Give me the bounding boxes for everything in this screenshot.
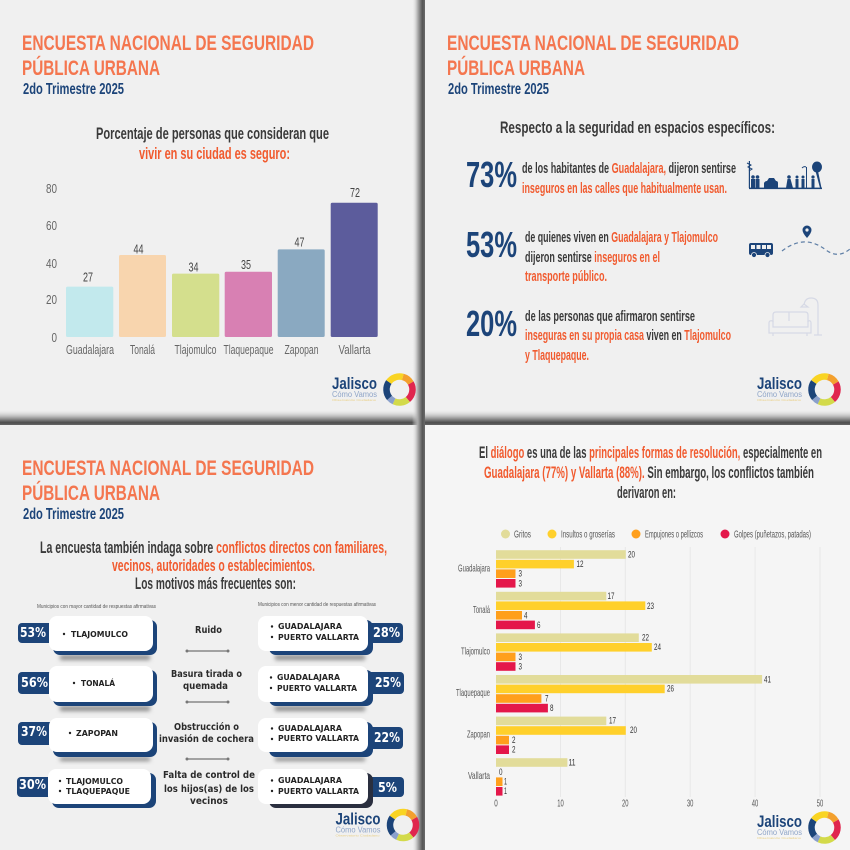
heading: Porcentaje de personas que consideran que: [96, 125, 329, 143]
subtitle: 2do Trimestre 2025: [23, 506, 124, 523]
title: ENCUESTA NACIONAL DE SEGURIDAD: [22, 457, 314, 480]
logo: Cómo Vamos: [336, 826, 380, 834]
category labels: Vallarta: [338, 342, 371, 357]
motive: Falta de control de: [163, 770, 255, 781]
logo: Observatorio Ciudadano: [336, 834, 380, 838]
left card: TLAJOMULCO: [66, 776, 123, 786]
right card: 22%: [374, 731, 400, 746]
bars: Zapopan: 17: [609, 716, 616, 726]
bars: Tlajomulco: 22: [642, 632, 649, 642]
motive: Ruido: [195, 625, 222, 636]
right card: PUERTO VALLARTA: [278, 786, 360, 796]
right card: GUADALAJARA: [277, 672, 341, 682]
logo: Observatorio Ciudadano: [757, 398, 801, 402]
row: hijos de los vecinos: [17, 769, 404, 808]
column caption: menor: Municipios con menor cantidad de respuestas afirmativas: [258, 602, 376, 608]
right card: [258, 718, 403, 761]
panel: seguridad en espacios específicos: [425, 0, 850, 425]
bars: Tonalá: 23: [647, 601, 654, 611]
heading: [96, 125, 329, 163]
subtitle: 2do Trimestre 2025: [448, 81, 549, 98]
x axis labels: 10: [557, 798, 564, 810]
bars: Guadalajara: [496, 550, 635, 588]
right card: PUERTO VALLARTA: [278, 733, 360, 743]
row: cochera: [18, 718, 403, 761]
title: PÚBLICA URBANA: [22, 56, 160, 80]
bars: Tlaquepaque: 41: [764, 674, 771, 684]
category labels: Guadalajara: [66, 342, 115, 357]
value labels: 44: [134, 242, 144, 256]
icon: sofa and lamp: [769, 298, 822, 336]
category labels: Tlaquepaque: [456, 687, 490, 699]
right card: PUERTO VALLARTA: [278, 632, 360, 642]
category labels: Tonalá: [130, 342, 155, 357]
logo: Observatorio Ciudadano: [757, 836, 801, 840]
y axis labels: 60: [46, 218, 57, 233]
title: [22, 32, 314, 80]
legend: Empujones o pellizcos: [645, 530, 703, 540]
category labels: [66, 342, 371, 357]
value labels: 27: [83, 270, 93, 284]
left card: [17, 769, 156, 808]
title: [22, 457, 314, 505]
logo: [757, 812, 838, 840]
statistic: 20%: inseguras en su propia casa viven en Tlajomulco: [525, 328, 731, 344]
bars: Zapopan: 2: [512, 744, 516, 754]
column caption: mayor: Municipios con mayor cantidad de respuestas afirmativas: [37, 604, 156, 610]
x axis labels: 0: [494, 798, 498, 810]
bars: Tlaquepaque: 7: [545, 694, 548, 704]
value labels: 34: [188, 260, 198, 274]
bars: Tlajomulco: 3: [518, 652, 522, 662]
category labels: Vallarta: [468, 770, 490, 782]
bars: Guadalajara: 3: [518, 568, 522, 578]
left card: TLAQUEPAQUE: [66, 786, 130, 796]
logo: Jalisco: [332, 374, 377, 393]
right card: [258, 769, 404, 808]
heading: [479, 444, 822, 502]
row: ruido: [18, 616, 403, 660]
bars: Vallarta: 1: [504, 786, 507, 796]
bars: [66, 203, 378, 337]
subtitle: 2do Trimestre 2025: [23, 81, 124, 98]
logo: Jalisco: [757, 812, 802, 831]
logo: Jalisco: [336, 810, 380, 828]
value labels: 47: [294, 234, 304, 250]
title: ENCUESTA NACIONAL DE SEGURIDAD: [447, 32, 739, 55]
statistic: 53%: [466, 224, 718, 285]
bars: Vallarta: 0: [499, 767, 502, 777]
right card: 25%: [375, 676, 401, 691]
category labels: Tlajomulco: [461, 646, 490, 658]
right card: 5%: [378, 781, 397, 796]
y axis labels: 0: [52, 330, 57, 345]
statistic: 73%: inseguros en las calles que habitualmente usan.: [522, 181, 727, 197]
heading: derivaron en:: [617, 484, 676, 502]
category labels: Tlajomulco: [174, 342, 216, 357]
bars: Vallarta: 1: [504, 776, 507, 786]
left card: [18, 616, 157, 660]
bars: Zapopan: 20: [630, 725, 637, 735]
right card: GUADALAJARA: [278, 775, 343, 785]
horizontal bar chart: [456, 547, 823, 810]
motive: [186, 625, 230, 652]
logo: Observatorio Ciudadano: [332, 398, 376, 402]
icon: street scene: [747, 161, 822, 189]
right card: [258, 616, 403, 660]
x axis labels: 40: [752, 798, 758, 810]
statistic: 53%: dijeron sentirse inseguros en el: [525, 250, 660, 266]
heading: La encuesta también indaga sobre conflictos directos con familiares,: [40, 539, 387, 557]
right card: 28%: [373, 626, 400, 641]
right card: PUERTO VALLARTA: [277, 683, 358, 693]
value labels: 72: [350, 185, 360, 200]
left card: ZAPOPAN: [76, 728, 118, 738]
motive: invasión de cochera: [159, 733, 254, 745]
motive: Basura tirada o: [171, 669, 242, 680]
motive: vecinos: [190, 796, 228, 807]
legend: [501, 530, 811, 540]
bar chart: [46, 181, 378, 357]
statistic: 20%: 20%: [466, 303, 517, 344]
bars: Tonalá: [496, 591, 654, 630]
bars: Tlaquepaque: 26: [667, 684, 674, 694]
statistic: 73%: 73%: [466, 154, 517, 195]
x axis labels: 20: [622, 798, 629, 810]
bars: Tonalá: 4: [524, 610, 528, 620]
right card: [258, 666, 404, 711]
category labels: Zapopan: [467, 728, 490, 740]
left card: 30%: [19, 778, 46, 793]
left card: [18, 718, 157, 761]
motive: [171, 669, 242, 704]
statistic: 20%: de las personas que afirmaron sentirse: [525, 309, 695, 325]
y axis labels: 40: [46, 256, 57, 271]
heading: Los motivos más frecuentes son:: [135, 575, 296, 593]
x axis labels: [494, 798, 823, 810]
statistic: 53%: transporte público.: [525, 269, 607, 285]
heading: vivir en su ciudad es seguro:: [139, 145, 290, 163]
panel: porcentaje de personas que consideran seguro vivir en su ciudad: [0, 0, 425, 425]
title: [447, 32, 739, 80]
right card: GUADALAJARA: [278, 723, 343, 733]
bars: Guadalajara: 12: [576, 559, 584, 569]
y axis labels: 80: [46, 181, 57, 196]
bars: Guadalajara: 3: [518, 578, 522, 588]
bars: Guadalajara: 20: [628, 550, 635, 560]
y axis labels: [46, 181, 57, 345]
category labels: [456, 562, 490, 782]
motive: los hijos(as) de los: [164, 784, 254, 795]
bars: Zapopan: 2: [512, 735, 516, 745]
statistic: 73%: de los habitantes de Guadalajara, dijeron sentirse: [522, 161, 736, 177]
category labels: Guadalajara: [458, 562, 490, 574]
logo: Cómo Vamos: [757, 390, 802, 399]
bars: Zapopan: [496, 716, 637, 754]
left card: TONALÁ: [81, 677, 116, 688]
statistic: 53%: de quienes viven en Guadalajara y Tlajomulco: [525, 230, 718, 246]
bars: Tlajomulco: [496, 632, 661, 672]
logo: [757, 374, 838, 402]
x axis labels: 50: [817, 798, 823, 810]
title: ENCUESTA NACIONAL DE SEGURIDAD: [22, 32, 314, 55]
bars: Tonalá: 6: [537, 620, 540, 630]
bars: Tlajomulco: 24: [654, 642, 661, 652]
bars: Tlajomulco: 3: [518, 662, 522, 672]
title: PÚBLICA URBANA: [447, 56, 585, 80]
left card: [18, 666, 157, 711]
panel: conflictos directos: [0, 425, 425, 850]
motive: [159, 721, 254, 760]
heading: vecinos, autoridades o establecimientos.: [112, 557, 315, 575]
statistic: 20%: [466, 303, 731, 364]
bars: Tlaquepaque: 8: [550, 703, 554, 713]
heading: [40, 539, 387, 593]
logo: Jalisco: [757, 374, 802, 393]
category labels: Tlaquepaque: [224, 342, 274, 357]
left card: 37%: [21, 725, 47, 740]
right card: GUADALAJARA: [278, 621, 343, 631]
value labels: [83, 185, 360, 284]
statistic: 73%: [466, 154, 736, 197]
category labels: Zapopan: [284, 342, 318, 357]
logo: Cómo Vamos: [332, 390, 377, 399]
y axis labels: 20: [46, 292, 57, 307]
motive: quemada: [183, 681, 228, 692]
legend: Gritos: [514, 530, 531, 540]
bars: Vallarta: [496, 758, 576, 796]
motive: [163, 770, 255, 807]
logo: [332, 374, 413, 402]
logo: [336, 810, 416, 838]
icon: bus and route: [749, 226, 850, 258]
row: basura: [18, 666, 404, 711]
bars: Tonalá: 17: [608, 591, 614, 601]
bars: Tlaquepaque: [496, 674, 771, 713]
value labels: 35: [241, 257, 251, 272]
logo: Cómo Vamos: [757, 828, 802, 837]
panel: formas de resolución: [425, 425, 850, 850]
x axis labels: 30: [687, 798, 693, 810]
category labels: Tonalá: [473, 604, 490, 616]
left card: TLAJOMULCO: [71, 629, 128, 639]
motive: Obstrucción o: [174, 721, 239, 733]
statistic: 20%: y Tlaquepaque.: [525, 348, 589, 364]
legend: Insultos o groserías: [561, 530, 615, 540]
title: PÚBLICA URBANA: [22, 481, 160, 505]
statistic: 53%: 53%: [466, 224, 517, 265]
left card: 56%: [21, 676, 48, 691]
bars: Vallarta: 11: [568, 758, 576, 768]
left card: 53%: [20, 626, 46, 641]
